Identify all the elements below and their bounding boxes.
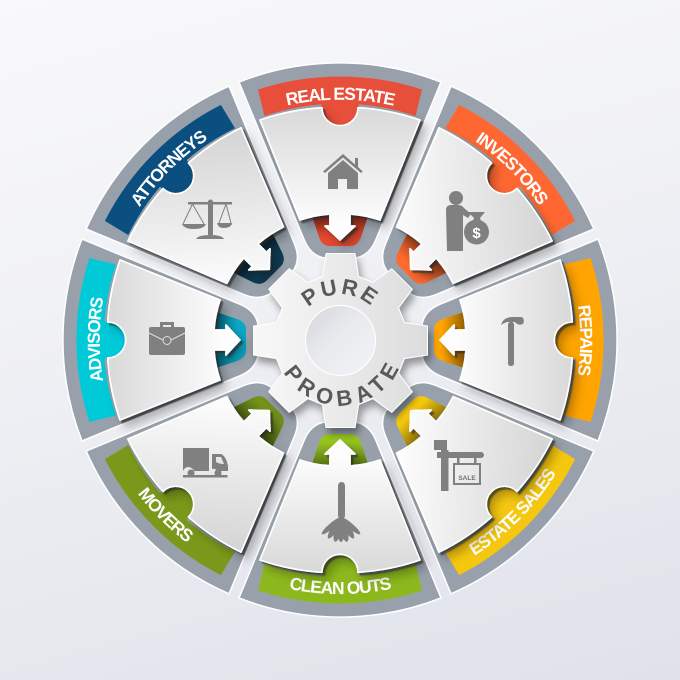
attorneys label: ATTORNEYS (132, 130, 206, 207)
gear centre hole (306, 306, 376, 376)
gear text: probate: PROBATE (284, 362, 399, 406)
attorneys arrow pocket (233, 233, 293, 293)
attorneys colour band (96, 96, 247, 247)
advisors card with arrow (108, 260, 240, 420)
panel: real estate (238, 62, 442, 258)
estate sales label: ESTATE SALES (468, 468, 555, 556)
investors arrow pocket (387, 233, 447, 293)
icon: duster (320, 482, 362, 543)
icon: briefcase (149, 322, 185, 355)
advisors arrow pocket (216, 312, 246, 368)
advisors label: ADVISORS (88, 297, 104, 381)
real estate label: REAL ESTATE (286, 88, 396, 106)
estate sales grey sector (327, 327, 607, 607)
gear body (254, 254, 428, 428)
icon: for sale sign: SALE (458, 475, 476, 482)
repairs grey sector (422, 239, 617, 441)
panel: repairs (422, 238, 618, 442)
repairs label: REPAIRS (578, 305, 592, 376)
icon: investor with money bag: $ (472, 225, 481, 242)
real estate colour band (258, 76, 422, 127)
clean outs grey sector (239, 422, 441, 617)
clean outs card with arrow (260, 440, 420, 572)
panel: movers (85, 382, 298, 595)
repairs card with arrow (440, 260, 572, 420)
clean outs arrow pocket (312, 434, 368, 464)
investors card with arrow (354, 119, 561, 326)
icon: delivery truck (183, 448, 228, 478)
repairs arrow pocket (434, 312, 464, 368)
investors colour band (433, 96, 584, 247)
repairs colour band (553, 258, 604, 422)
panel: attorneys (86, 86, 298, 298)
real estate arrow pocket (312, 216, 368, 246)
central gear (252, 253, 436, 438)
real estate grey sector (239, 63, 441, 258)
movers card with arrow (119, 354, 326, 561)
advisors colour band (76, 258, 127, 422)
icon: for sale sign (434, 440, 484, 491)
investors grey sector (327, 73, 607, 353)
icon: scales of justice (182, 200, 232, 239)
gear text: pure: PURE (300, 278, 378, 306)
estate sales colour band (433, 433, 584, 584)
investors label: INVESTORS (476, 132, 548, 204)
movers grey sector (73, 327, 353, 607)
estate sales arrow pocket (387, 387, 447, 447)
advisors grey sector (63, 239, 258, 441)
movers colour band (96, 433, 247, 584)
icon: investor with money bag (446, 191, 489, 251)
estate sales card with arrow (354, 354, 561, 561)
attorneys card with arrow (119, 119, 326, 326)
panel: investors (382, 86, 594, 298)
icon: hammer (501, 317, 524, 366)
clean outs colour band (258, 553, 422, 604)
attorneys grey sector (73, 73, 353, 353)
panel: estate sales (382, 382, 595, 595)
panel: clean outs (238, 422, 442, 618)
real estate card with arrow (260, 108, 420, 240)
panel: advisors (62, 238, 258, 442)
movers arrow pocket (233, 387, 293, 447)
clean outs label: CLEAN OUTS (290, 578, 391, 594)
icon: house (323, 154, 363, 189)
movers label: MOVERS (138, 487, 193, 542)
